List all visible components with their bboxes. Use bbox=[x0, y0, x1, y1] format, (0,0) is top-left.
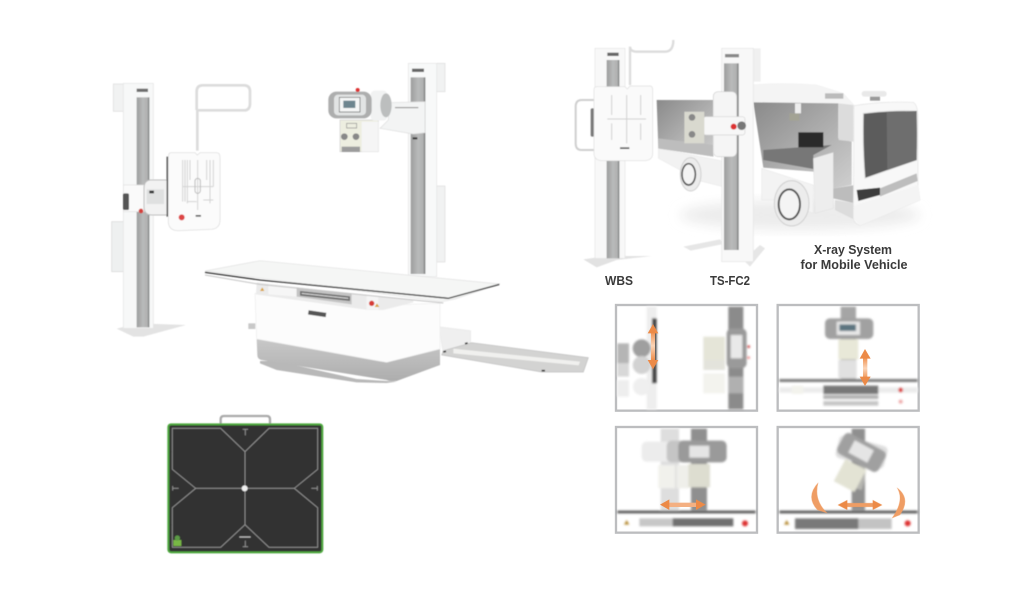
vehicle interior bbox=[753, 102, 853, 188]
detector alignment marks bbox=[172, 428, 318, 547]
vehicle rear cargo bay bbox=[657, 100, 723, 187]
label: X-ray System for Mobile Vehicle: for Mobile Vehicle bbox=[800, 258, 908, 272]
arrow: horizontal movement bbox=[660, 499, 706, 510]
flat panel detector with carry handle bbox=[168, 416, 322, 552]
WBS and TS-FC2 stands bbox=[576, 40, 765, 267]
patient table base bbox=[255, 293, 440, 381]
WBS stand bbox=[576, 40, 673, 267]
pull-out floor tray bbox=[438, 327, 588, 372]
vehicle wheels bbox=[680, 158, 809, 226]
wall bucky stand handle frame bbox=[197, 85, 250, 151]
motion diagrams bbox=[616, 305, 919, 533]
TS-FC2 stand bbox=[683, 48, 765, 267]
tube stand column bbox=[408, 63, 445, 277]
panel: table vertical lift bbox=[778, 305, 919, 411]
panel: tube rotation and tracking bbox=[778, 427, 919, 533]
detector center mark bbox=[242, 485, 248, 491]
detector green badge bbox=[173, 535, 181, 546]
mobile vehicle bbox=[657, 84, 920, 230]
wall bucky detector tray bbox=[144, 153, 220, 231]
vehicle shadow bbox=[680, 200, 920, 230]
main X-ray system: floor-mounted table, tube stand and wall bucky stand bbox=[112, 63, 588, 372]
detector body bbox=[168, 424, 322, 552]
wall bucky stand column bbox=[112, 83, 186, 337]
label: X-ray System for Mobile Vehicle: X-ray System bbox=[814, 243, 892, 257]
arrows: rotation and horizontal movement bbox=[811, 482, 905, 518]
panel: horizontal tube travel bbox=[616, 427, 757, 533]
arrow: table lift bbox=[860, 349, 871, 386]
table side connector bbox=[248, 323, 255, 329]
detector handle bbox=[221, 416, 270, 425]
vehicle cab bbox=[825, 91, 920, 226]
label: TS-FC2: TS-FC2 bbox=[710, 274, 750, 288]
table carriage with warning labels and stop button bbox=[256, 282, 413, 310]
X-ray tube with touch screen bbox=[328, 88, 392, 152]
patient table: base, carriage and table top bbox=[205, 261, 500, 383]
panel: vertical tilt and tube travel side view bbox=[616, 305, 757, 411]
patient table feet bbox=[260, 361, 397, 383]
detector logo bbox=[239, 536, 251, 538]
table top bbox=[205, 261, 500, 303]
label: WBS: WBS bbox=[605, 274, 633, 288]
vehicle roof bbox=[750, 84, 854, 108]
vehicle lower body and door bbox=[762, 152, 855, 220]
tube head arm bbox=[380, 102, 425, 139]
arrow: vertical movement bbox=[648, 324, 658, 369]
